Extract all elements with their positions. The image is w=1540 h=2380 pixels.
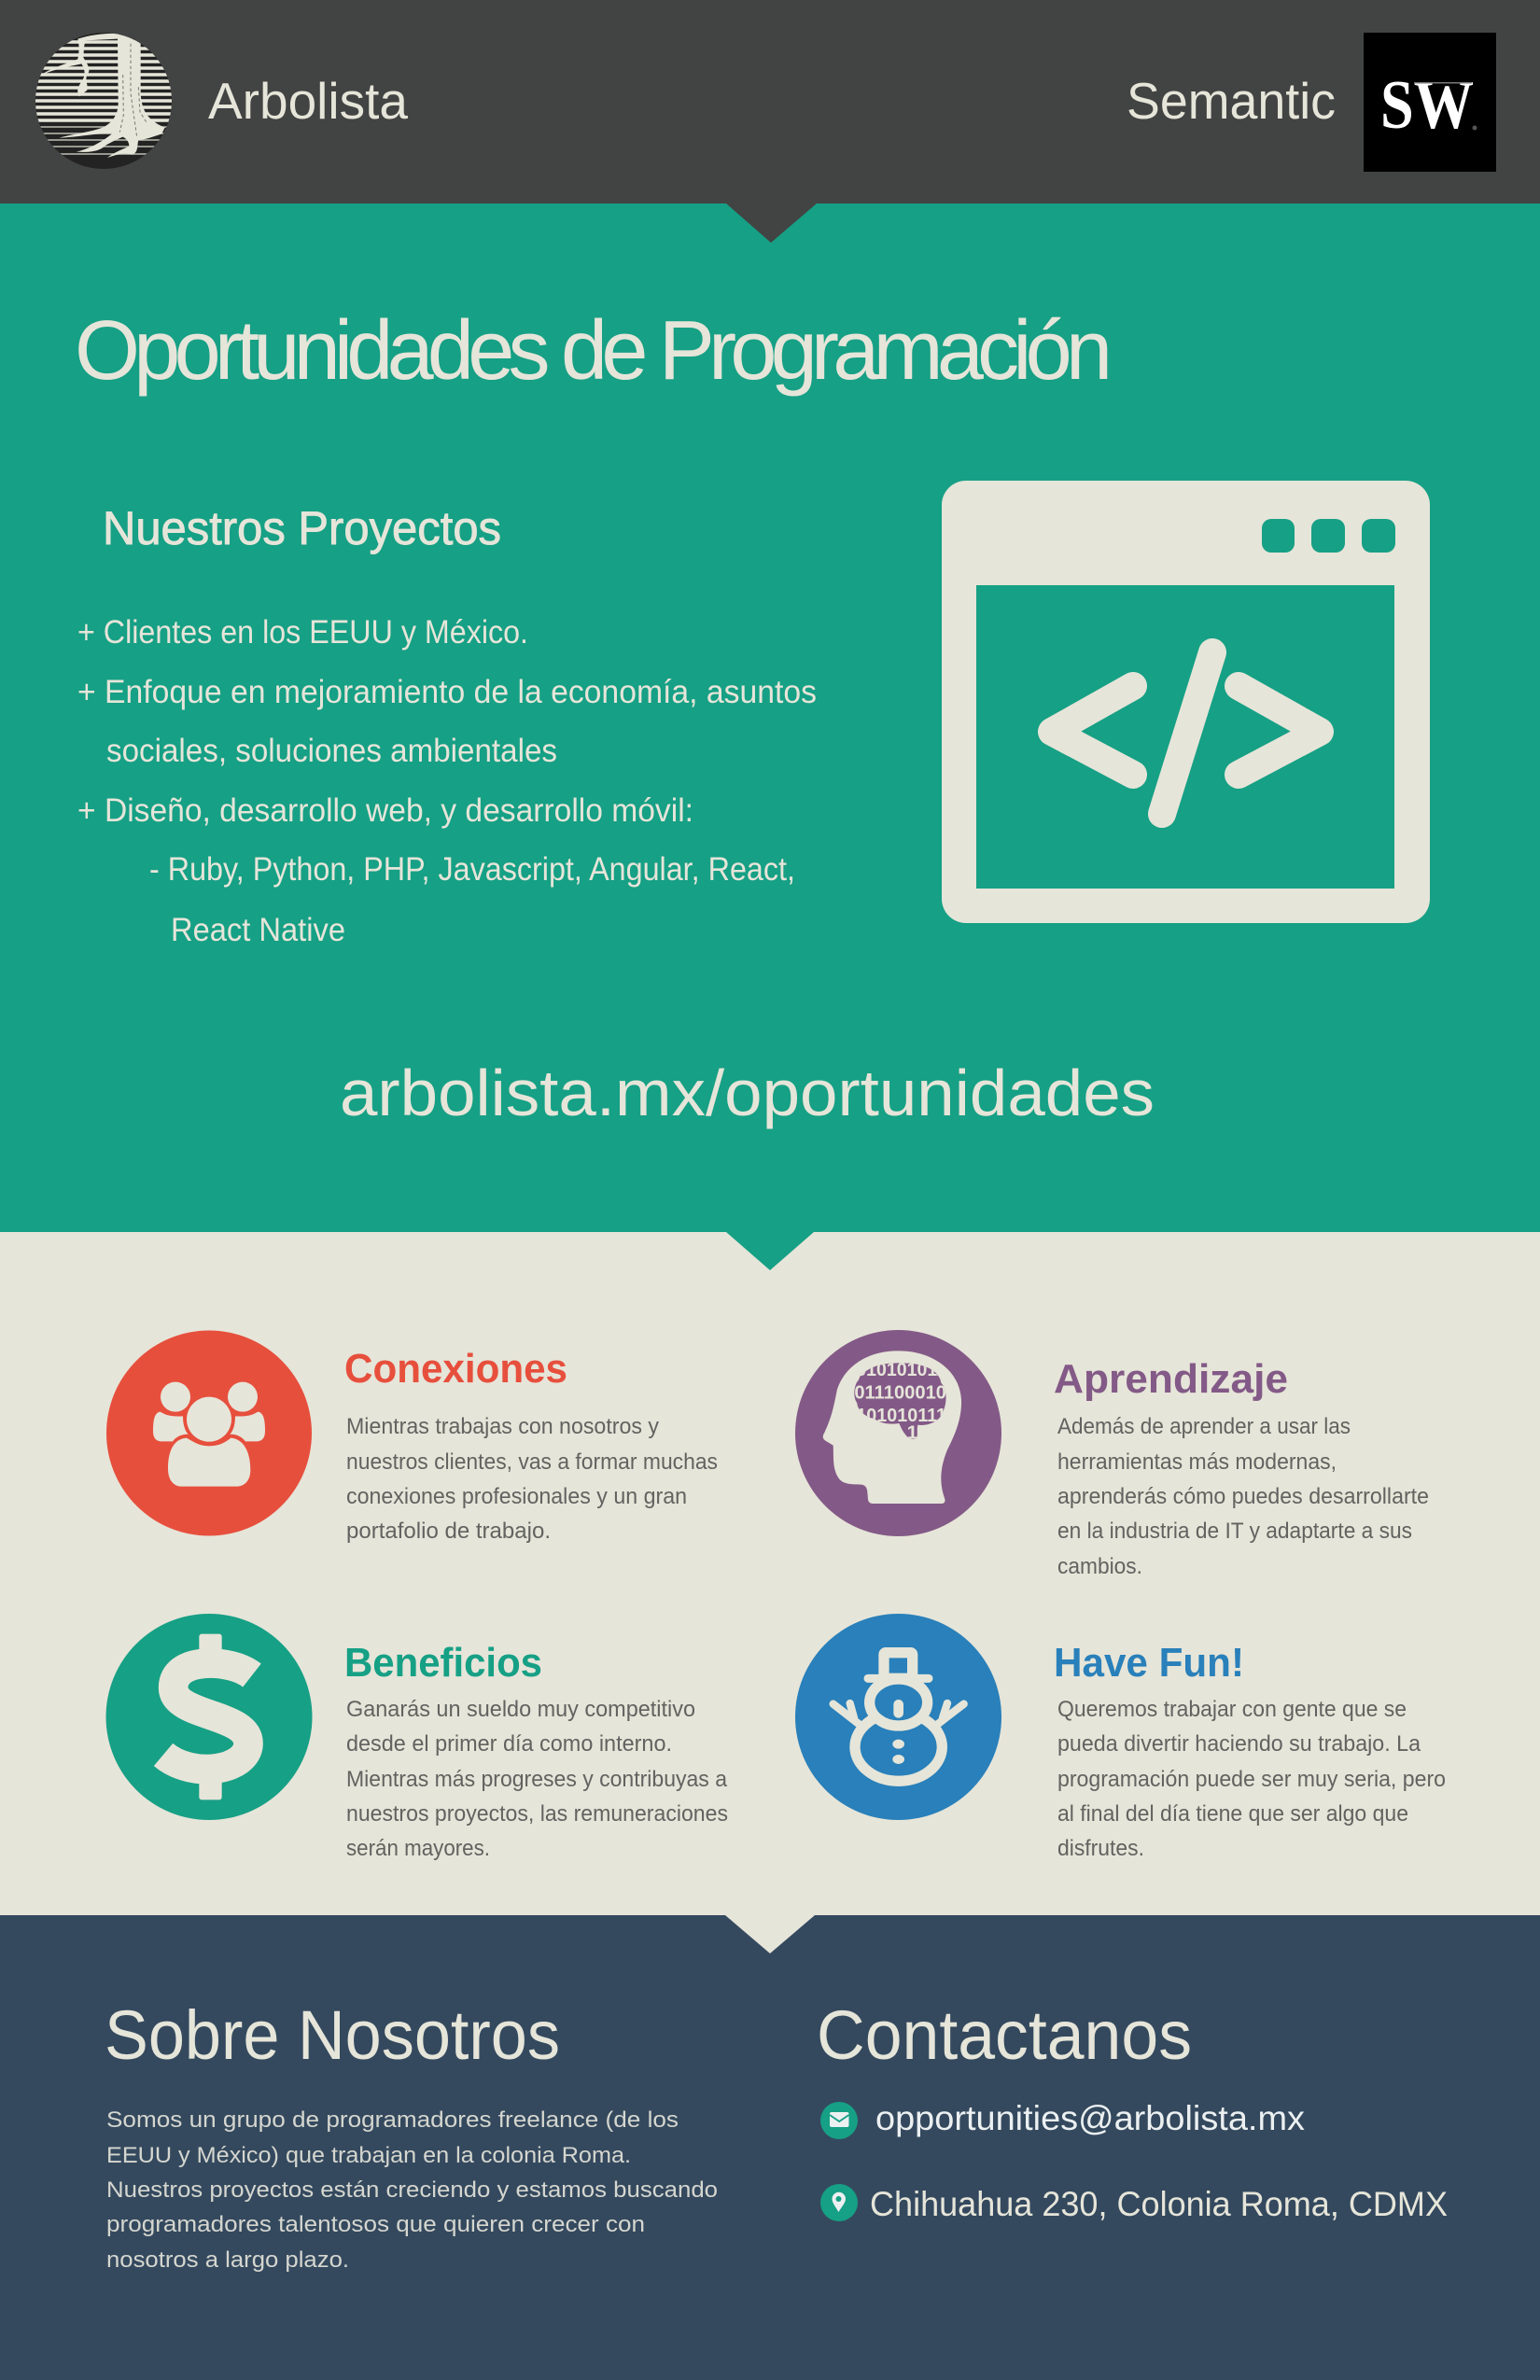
icon: head with binary brain: 011100010: [854, 1381, 946, 1403]
heading: aprendizaje: Aprendizaje: [1054, 1356, 1288, 1402]
text: beneficios: nuestros proyectos, las remuneraciones: [346, 1801, 728, 1827]
arrow: cream to navy: [725, 1915, 815, 1953]
text: conexiones: portafolio de trabajo.: [346, 1519, 551, 1544]
text block: project list: + Clientes en los EEUU y México.: [77, 614, 528, 651]
text block: project list: - Ruby, Python, PHP, Javascript, Angular, React,: [149, 851, 795, 888]
block: beneficios: [106, 1614, 728, 1861]
text: sobre nosotros: programadores talentosos que quieren crecer con: [106, 2212, 645, 2237]
icon: head with binary brain: [795, 1330, 1001, 1536]
text: have fun: programación puede ser muy seria, pero: [1057, 1767, 1446, 1792]
icon: head with binary brain: 010101011: [856, 1359, 946, 1380]
brand: semantic: Semantic: [1127, 72, 1336, 130]
panel: oportunidades: [0, 203, 1540, 1232]
text block: project list: + Enfoque en mejoramiento de la economía, asuntos: [77, 674, 817, 710]
text: aprendizaje: [1057, 1414, 1429, 1579]
text: sobre nosotros: nosotros a largo plazo.: [106, 2247, 349, 2273]
icon: head with binary brain: 101010111: [856, 1405, 946, 1426]
panel: footer: [0, 1915, 1540, 2380]
icon: dollar: [106, 1614, 312, 1820]
text: beneficios: serán mayores.: [346, 1836, 490, 1861]
icon: head with binary brain: 11: [907, 1422, 928, 1444]
text: conexiones: conexiones profesionales y un gran: [346, 1484, 687, 1509]
text: beneficios: desde el primer día como interno.: [346, 1731, 672, 1757]
icon: location pin: [820, 2184, 858, 2221]
block: aprendizaje: [795, 1330, 1429, 1579]
panel: beneficios: [0, 1232, 1540, 1915]
arrow: green to cream: [726, 1232, 814, 1270]
heading: conexiones: Conexiones: [344, 1346, 567, 1392]
contact: address: Chihuahua 230, Colonia Roma, CDMX: [870, 2185, 1448, 2223]
text block: project list: [77, 614, 817, 948]
logo: arbolista tree: [35, 33, 172, 169]
text: have fun: [1057, 1697, 1446, 1861]
text: conexiones: nuestros clientes, vas a formar muchas: [346, 1449, 718, 1475]
text: beneficios: Ganarás un sueldo muy competitivo: [346, 1697, 695, 1722]
contact: email: opportunities@arbolista.mx: [875, 2099, 1305, 2137]
text: conexiones: [346, 1414, 718, 1544]
logo: semantic sw: SW: [1380, 67, 1474, 144]
link: url: arbolista.mx/oportunidades: [340, 1057, 1155, 1129]
text: aprendizaje: aprenderás cómo puedes desarrollarte: [1057, 1484, 1429, 1509]
text: sobre nosotros: [106, 2107, 718, 2273]
text: sobre nosotros: EEUU y México) que trabajan en la colonia Roma.: [106, 2143, 631, 2168]
text block: project list: sociales, soluciones ambientales: [106, 733, 557, 769]
icon: mail: [820, 2102, 858, 2139]
heading: nuestros proyectos: Nuestros Proyectos: [103, 502, 501, 554]
text: have fun: pueda divertir haciendo su trabajo. La: [1057, 1731, 1421, 1757]
header: [0, 0, 1540, 243]
block: conexiones: [106, 1331, 718, 1544]
logo: semantic sw: [1364, 33, 1496, 172]
title: Oportunidades de Programación: [75, 304, 1113, 398]
text: beneficios: Mientras más progreses y contribuyas a: [346, 1767, 728, 1792]
text: conexiones: Mientras trabajas con nosotros y: [346, 1414, 659, 1439]
icon: people: [106, 1331, 312, 1536]
text: have fun: disfrutes.: [1057, 1836, 1144, 1861]
heading: have fun: Have Fun!: [1054, 1640, 1244, 1686]
text: aprendizaje: herramientas más modernas,: [1057, 1449, 1337, 1475]
heading: beneficios: Beneficios: [344, 1640, 542, 1686]
arrow: header to green: [726, 203, 817, 243]
text: have fun: al final del día tiene que ser algo que: [1057, 1801, 1408, 1827]
heading: sobre nosotros: Sobre Nosotros: [105, 1996, 560, 2074]
text: have fun: Queremos trabajar con gente que se: [1057, 1697, 1407, 1722]
text: beneficios: [346, 1697, 728, 1861]
text block: project list: React Native: [171, 912, 345, 948]
block: have fun: [795, 1614, 1446, 1861]
text: sobre nosotros: Somos un grupo de programadores freelance (de los: [106, 2107, 679, 2133]
heading: contactanos: Contactanos: [817, 1996, 1192, 2074]
icon: snowman: [795, 1614, 1001, 1820]
text: aprendizaje: cambios.: [1057, 1554, 1142, 1579]
brand: arbolista: Arbolista: [208, 72, 408, 130]
text: aprendizaje: Además de aprender a usar las: [1057, 1414, 1351, 1439]
icon: code window: [942, 481, 1430, 923]
text: sobre nosotros: Nuestros proyectos están creciendo y estamos buscando: [106, 2177, 718, 2203]
text block: project list: + Diseño, desarrollo web, y desarrollo móvil:: [77, 792, 693, 829]
text: aprendizaje: en la industria de IT y adaptarte a sus: [1057, 1519, 1412, 1544]
